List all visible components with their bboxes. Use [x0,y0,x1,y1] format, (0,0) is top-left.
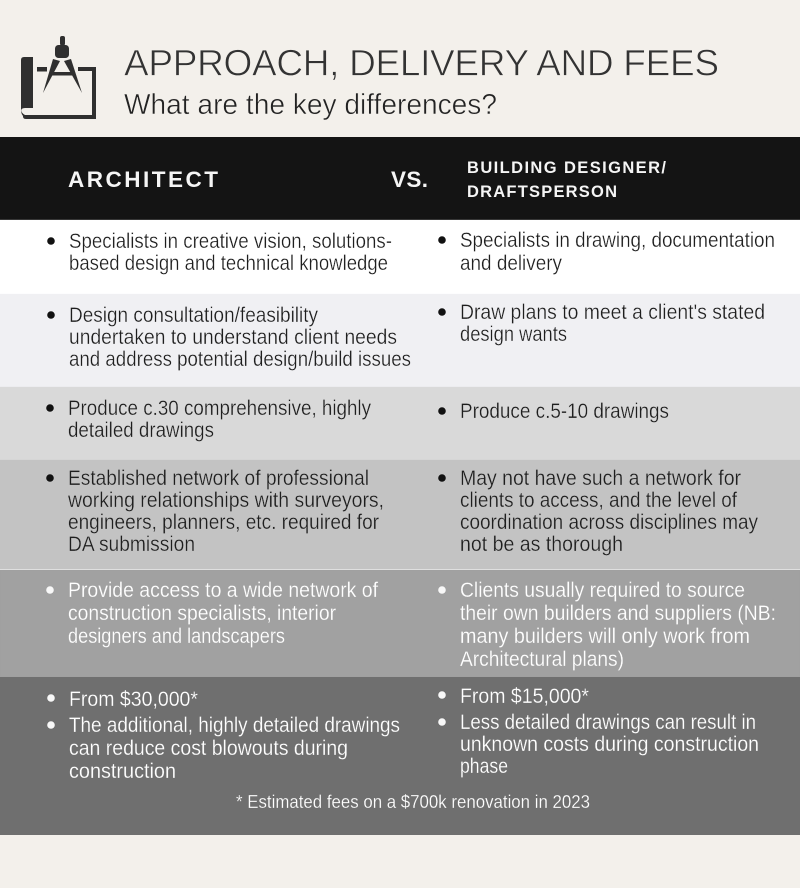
architect fees [47,688,400,783]
architect consultation: Design consultation/feasibility [69,304,318,327]
architect expertise [47,230,392,275]
designer consultation: Draw plans to meet a client's stated [460,301,765,324]
architect network [46,467,384,556]
architect network: engineers, planners, etc. required for [68,511,379,534]
architect network: DA submission [68,533,195,556]
heading: architect: ARCHITECT [68,167,218,192]
architect network: working relationships with surveyors, [67,489,384,512]
title: APPROACH, DELIVERY AND FEES [124,42,719,84]
panel: header row [0,137,800,220]
designer network: not be as thorough [460,533,623,556]
architect expertise: based design and technical knowledge [69,252,388,275]
architect consultation [47,304,411,371]
panel: row consultation [0,294,800,387]
architect drawings [46,397,371,442]
designer consultation [438,301,765,346]
heading: building designer: DRAFTSPERSON [467,183,617,201]
architect expertise: Specialists in creative vision, solutions- [69,230,392,253]
architect fees: The additional, highly detailed drawings [69,714,400,737]
designer fees: phase [460,755,508,778]
icon: drafting compass over plan [21,36,96,119]
footnote: * Estimated fees on a $700k renovation in 2023 [236,792,590,812]
designer builders: many builders will only work from [460,625,750,648]
architect fees: construction [69,760,176,783]
designer network [438,467,758,556]
architect drawings: Produce c.30 comprehensive, highly [68,397,371,420]
architect builders: Provide access to a wide network of [68,579,378,602]
architect builders [46,579,378,648]
panel: row builders [0,570,800,677]
architect consultation: undertaken to understand client needs [69,326,397,349]
designer fees [438,685,759,778]
panel: row fees [0,677,800,835]
heading: versus: VS. [391,167,428,192]
heading: building designer: BUILDING DESIGNER/ [467,159,666,177]
designer fees: unknown costs during construction [460,733,759,756]
architect drawings: detailed drawings [68,419,214,442]
designer builders [438,579,776,671]
panel: row drawings [0,387,800,460]
architect consultation: and address potential design/build issues [69,348,411,371]
architect fees: can reduce cost blowouts during [69,737,348,760]
designer expertise [438,229,775,275]
panel: row professional network [0,460,800,570]
subtitle: What are the key differences? [124,89,497,121]
heading: building designer [467,159,666,201]
architect builders: construction specialists, interior [68,602,336,625]
architect builders: designers and landscapers [68,625,285,648]
designer consultation: design wants [460,323,567,346]
panel: row expertise [0,220,800,294]
designer expertise: and delivery [460,252,562,275]
designer network: clients to access, and the level of [460,489,737,512]
designer builders: Clients usually required to source [460,579,745,602]
architect network: Established network of professional [68,467,369,490]
designer network: coordination across disciplines may [460,511,758,534]
designer fees: Less detailed drawings can result in [460,711,756,734]
designer fees: From $15,000* [460,685,589,708]
designer network: May not have such a network for [460,467,741,490]
designer builders: their own builders and suppliers (NB: [460,602,776,625]
designer builders: Architectural plans) [460,648,624,671]
architect fees: From $30,000* [69,688,198,711]
designer drawings: Produce c.5-10 drawings [460,400,669,423]
